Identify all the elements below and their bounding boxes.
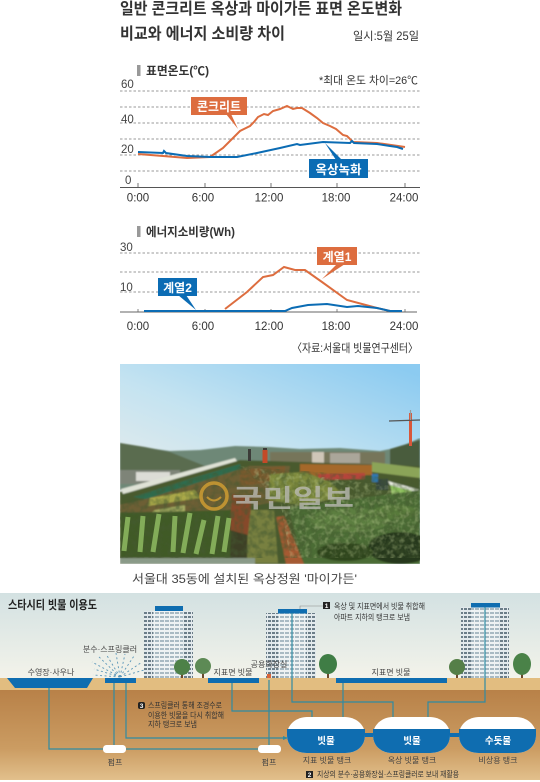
sprinkler spray (92, 653, 144, 677)
x axis labels: 12:00 (255, 321, 283, 333)
tank: surface rainwater (287, 717, 365, 765)
x axis labels: 0:00 (127, 321, 149, 333)
note 2: 지상의 분수·공용화장실·스프링클러로 보내 재활용 (317, 769, 459, 779)
x axis labels: 6:00 (192, 321, 214, 333)
title: 일반 콘크리트 옥상과 마이가든 표면 온도변화 (120, 0, 402, 18)
photo details: crane (389, 410, 420, 446)
y axis labels: 10 (120, 282, 133, 294)
note 1: 아파트 지하의 탱크로 보냄 (334, 612, 410, 622)
tank: emergency tap water: 비상용 탱크 (478, 755, 518, 765)
building 3 (461, 603, 509, 678)
photo foliage texture (120, 466, 420, 558)
x axis labels (127, 321, 418, 333)
pipes (49, 607, 485, 749)
photo watermark: 국민일보 (232, 485, 354, 513)
tank: surface rainwater: 지표 빗물 탱크 (303, 755, 351, 765)
pumps (103, 745, 281, 767)
label: green roof: 옥상녹화 (316, 162, 362, 177)
y axis labels: 0 (125, 175, 131, 187)
photo details: people (248, 448, 268, 463)
public toilet (251, 659, 287, 678)
line: green roof (138, 141, 403, 157)
tank: fountain and sprinkler (83, 644, 137, 683)
y axis labels: 30 (120, 242, 133, 254)
surface rainwater collector left (208, 667, 259, 683)
building 1 (144, 606, 193, 678)
chart heading: surface temperature: 표면온도(℃) (146, 64, 209, 78)
photo details: grass rows (124, 513, 229, 554)
note 3 (138, 700, 224, 729)
label: green roof (309, 143, 368, 178)
label: series 1 (317, 247, 357, 279)
note 1: 1 (325, 603, 329, 610)
tank connectors (365, 733, 459, 737)
line: concrete (138, 106, 405, 158)
date note: 일시:5월 25일 (353, 29, 419, 43)
label: series 2: 계열2 (163, 280, 192, 295)
tank: roof rainwater: 빗물 (403, 735, 421, 747)
source note: 〈자료:서울대 빗물연구센터〉 (292, 342, 418, 355)
max difference note: *최대 온도 차이=26℃ (319, 74, 418, 87)
tank: emergency tap water: 수돗물 (485, 736, 511, 747)
tank: roof rainwater: 옥상 빗물 탱크 (388, 755, 436, 765)
label: series 1: 계열1 (323, 249, 352, 264)
pool: swimming pool and sauna (7, 667, 93, 688)
chart: surface temperature (120, 64, 420, 204)
x axis labels: 12:00 (255, 192, 283, 204)
y axis labels: 40 (121, 114, 134, 126)
diagram title: 스타시티 빗물 이용도 (8, 598, 97, 612)
x axis labels: 18:00 (322, 321, 350, 333)
building 2 (266, 609, 316, 678)
chart: energy consumption (120, 225, 420, 355)
photo watermark (201, 483, 354, 513)
public toilet: 공용화장실 (251, 659, 287, 669)
surface rainwater collector left: 지표면 빗물 (213, 667, 253, 677)
title: 비교와 에너지 소비량 차이 (120, 25, 285, 43)
note 1: 옥상 및 지표면에서 빗물 취합해 (334, 601, 425, 611)
note 3: 3 (140, 703, 144, 710)
note 3: 지하 탱크로 보냄 (148, 719, 197, 729)
tank: surface rainwater: 빗물 (317, 735, 335, 747)
tank: fountain and sprinkler: 분수·스프링클러 (83, 644, 137, 654)
y axis labels: 60 (121, 79, 134, 91)
label: concrete: 콘크리트 (197, 100, 241, 114)
x axis labels: 18:00 (322, 192, 350, 204)
line: series 1 (225, 267, 402, 311)
x axis labels: 0:00 (127, 192, 149, 204)
surface rainwater collector right: 지표면 빗물 (371, 667, 411, 677)
note 3: 이용한 빗물을 다시 취합해 (148, 710, 224, 720)
tank: roof rainwater (373, 717, 450, 765)
diagram background (0, 593, 540, 780)
x axis labels: 24:00 (390, 192, 418, 204)
x axis labels (127, 192, 418, 204)
photo caption: 서울대 35동에 설치된 옥상정원 '마이가든' (132, 572, 357, 586)
y axis labels (120, 242, 133, 294)
diagram: star city rainwater use (0, 593, 540, 780)
x axis labels: 24:00 (390, 321, 418, 333)
tank: emergency tap water (459, 717, 536, 765)
note 1 (300, 601, 425, 622)
label: concrete (191, 97, 247, 129)
chart heading: energy consumption: 에너지소비량(Wh) (146, 225, 235, 239)
y axis labels: 20 (121, 144, 134, 156)
note 3: 스프링클러 통해 조경수로 (148, 700, 222, 710)
pumps: 펌프 (262, 757, 276, 767)
photo: rooftop garden (120, 364, 432, 564)
trees (174, 653, 531, 678)
label: series 2 (158, 278, 197, 310)
title (120, 0, 402, 43)
surface rainwater collector right (336, 667, 447, 683)
y axis labels (121, 79, 134, 187)
x axis labels: 6:00 (192, 192, 214, 204)
line: series 2 (144, 304, 402, 311)
note 2: 2 (308, 772, 312, 779)
pumps: 펌프 (108, 757, 122, 767)
pool: swimming pool and sauna: 수영장·사우나 (28, 667, 75, 677)
